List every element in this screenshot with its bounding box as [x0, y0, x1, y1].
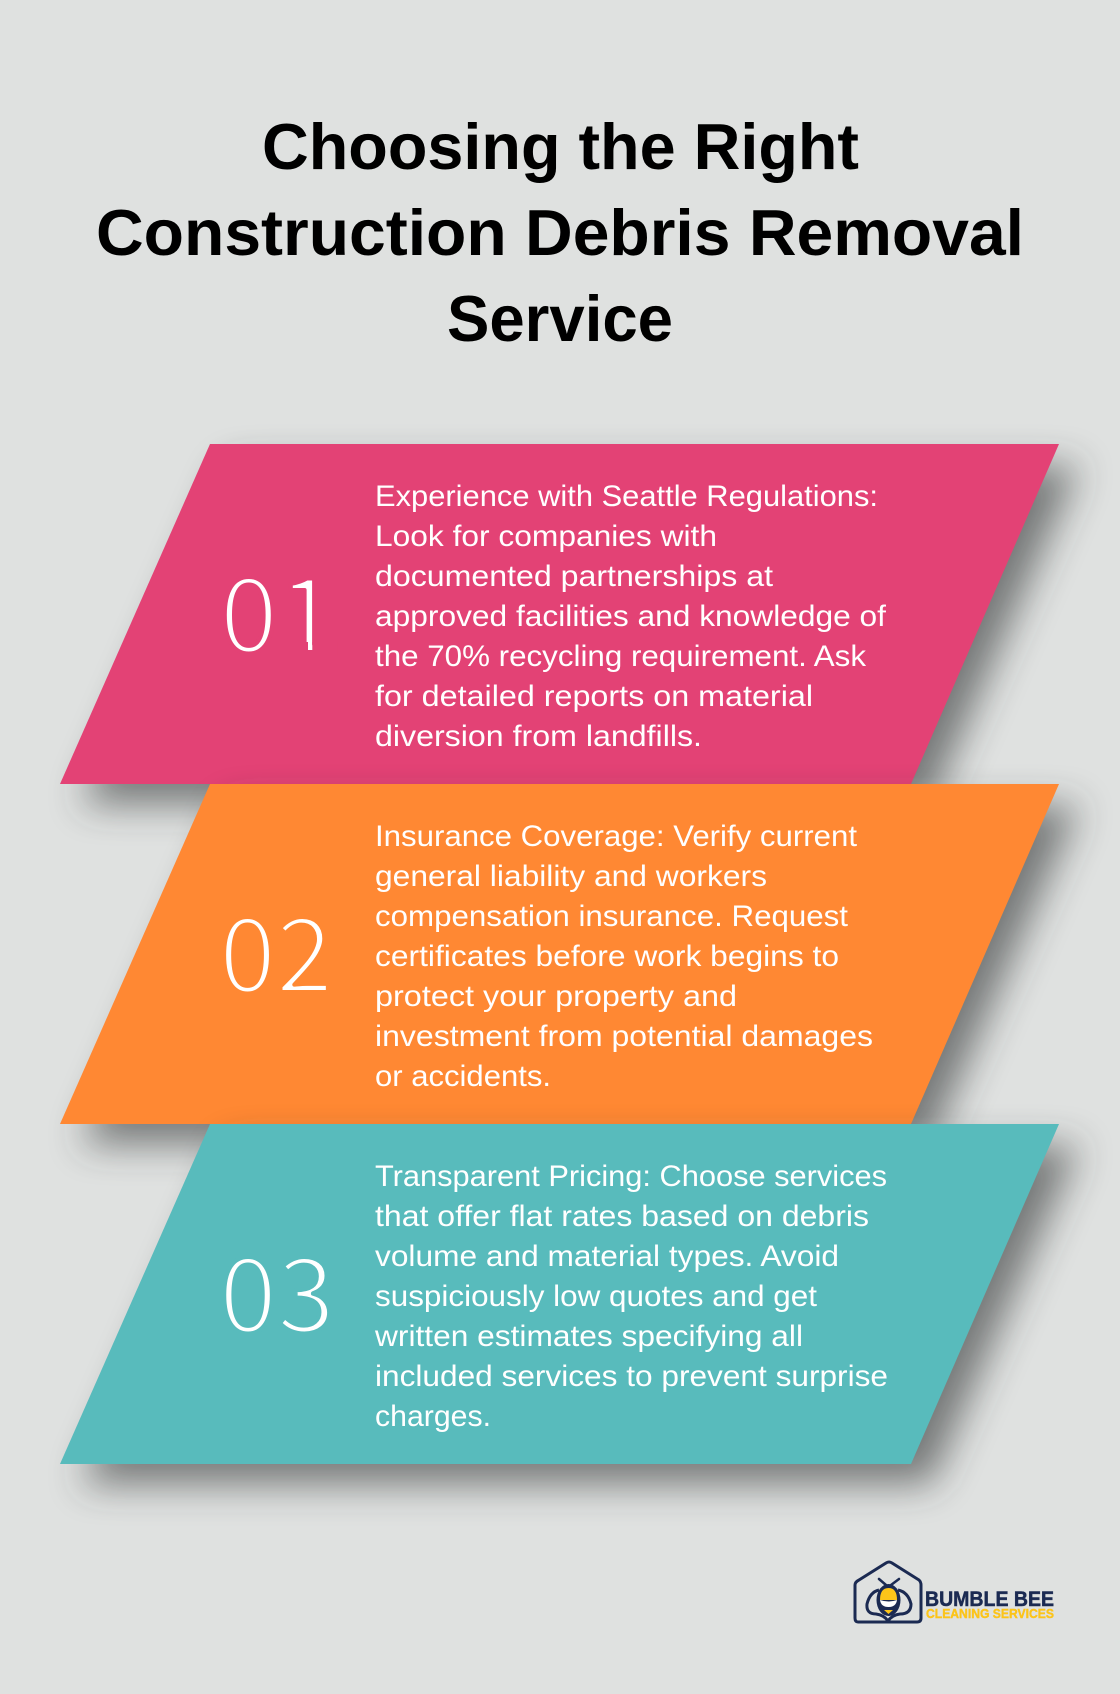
text: pricing: charges. — [375, 1400, 491, 1433]
logo: Bumble Bee Cleaning Services — [855, 1562, 1054, 1622]
text: insurance: or accidents. — [375, 1060, 551, 1093]
text: pricing: included services to prevent surprise — [375, 1360, 888, 1393]
text: experience: documented partnerships at — [375, 560, 774, 593]
text: experience: Experience with Seattle Regulations: — [375, 480, 878, 513]
text: insurance: investment from potential damages — [375, 1020, 873, 1053]
title — [96, 110, 1024, 355]
logo wordmark: CLEANING SERVICES — [926, 1607, 1054, 1621]
number 03: 03 — [219, 1213, 335, 1362]
text: pricing: suspiciously low quotes and get — [375, 1280, 818, 1313]
title: Service — [447, 282, 673, 355]
logo wordmark — [925, 1588, 1054, 1621]
teal parallelogram — [60, 1124, 1059, 1464]
text: pricing: Transparent Pricing: Choose services — [375, 1160, 887, 1193]
text: experience — [375, 480, 887, 753]
panel: 03 transparent pricing — [60, 1124, 1079, 1484]
orange parallelogram — [60, 784, 1059, 1124]
text: pricing: that offer flat rates based on debris — [375, 1200, 869, 1233]
text: experience: Look for companies with — [375, 520, 717, 553]
logo wordmark: BUMBLE BEE — [925, 1588, 1054, 1611]
text: pricing: volume and material types. Avoid — [375, 1240, 839, 1273]
title: Construction Debris Removal — [96, 196, 1024, 269]
panel: 02 insurance coverage — [60, 784, 1079, 1144]
text: insurance: protect your property and — [375, 980, 737, 1013]
pink parallelogram — [60, 444, 1059, 784]
text: insurance — [375, 820, 873, 1093]
text: pricing: written estimates specifying all — [374, 1320, 803, 1353]
text: experience: diversion from landfills. — [375, 720, 702, 753]
text: insurance: compensation insurance. Request — [375, 900, 849, 933]
panel: 01 experience with Seattle regulations — [60, 444, 1079, 804]
number 01: 01 — [220, 533, 336, 682]
title: Choosing the Right — [262, 110, 859, 183]
text: insurance: Insurance Coverage: Verify current — [375, 820, 858, 853]
icon: house with bee — [855, 1562, 921, 1622]
number 02: 02 — [219, 873, 333, 1022]
text: insurance: certificates before work begins to — [375, 940, 839, 973]
text: experience: the 70% recycling requirement. Ask — [375, 640, 867, 673]
text: experience: approved facilities and knowledge of — [375, 600, 887, 633]
text: experience: for detailed reports on material — [375, 680, 813, 713]
text: pricing — [374, 1160, 888, 1433]
text: insurance: general liability and workers — [375, 860, 767, 893]
